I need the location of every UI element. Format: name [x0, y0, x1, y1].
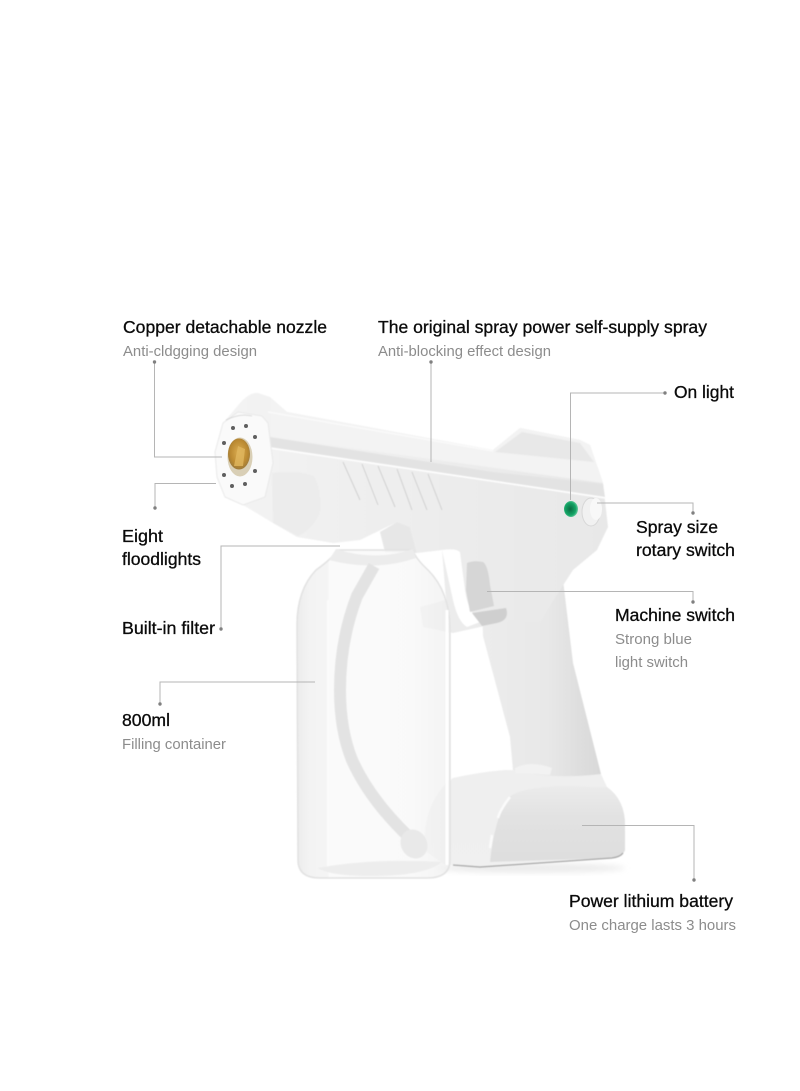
label: eight floodlights: Eight — [122, 526, 163, 546]
label: 800ml: Filling container — [122, 736, 226, 753]
trigger guard highlight — [442, 549, 480, 627]
handle — [480, 540, 601, 776]
floor shadow — [435, 863, 625, 873]
label: machine switch: Strong blue — [615, 631, 692, 648]
muzzle face — [215, 412, 273, 505]
label: 800ml: 800ml — [122, 710, 170, 730]
label: spray size switch — [636, 517, 735, 560]
label: machine switch: Machine switch — [615, 605, 735, 625]
rotary switch — [582, 498, 602, 526]
battery base — [424, 770, 625, 866]
label: on light: On light — [674, 382, 734, 402]
label: eight floodlights: floodlights — [122, 549, 201, 569]
label: battery: Power lithium battery — [569, 891, 733, 911]
trigger — [466, 561, 494, 612]
label: spray power: The original spray power self-supply spray — [378, 317, 707, 337]
label: 800ml — [122, 710, 226, 753]
green on light — [564, 501, 578, 517]
label: copper nozzle — [123, 317, 327, 360]
label: copper nozzle: Anti-cldgging design — [123, 343, 257, 360]
tube filter — [395, 825, 433, 863]
label: battery — [569, 891, 736, 934]
barrel underside shading — [272, 472, 320, 536]
label: machine switch: light switch — [615, 654, 688, 671]
rear sight — [495, 432, 594, 462]
suction tube — [340, 566, 410, 838]
label: spray size switch: Spray size — [636, 517, 718, 537]
side band — [270, 437, 605, 497]
spray gun product — [215, 393, 625, 878]
label: spray size switch: rotary switch — [636, 540, 735, 560]
label: spray power: Anti-blocking effect design — [378, 343, 551, 360]
neck block — [380, 522, 417, 553]
bottle neck — [329, 549, 416, 566]
label: copper nozzle: Copper detachable nozzle — [123, 317, 327, 337]
gun body — [215, 393, 608, 633]
label: machine switch — [615, 605, 735, 671]
label: battery: One charge lasts 3 hours — [569, 917, 736, 934]
label: built-in filter: Built-in filter — [122, 618, 215, 638]
nozzle LEDs — [222, 424, 257, 488]
label: eight floodlights — [122, 526, 201, 569]
leader lines — [153, 360, 696, 882]
bottle — [297, 549, 450, 878]
slide grip grooves — [343, 462, 442, 510]
top face — [270, 397, 603, 483]
copper nozzle — [228, 438, 252, 476]
label: spray power — [378, 317, 707, 360]
